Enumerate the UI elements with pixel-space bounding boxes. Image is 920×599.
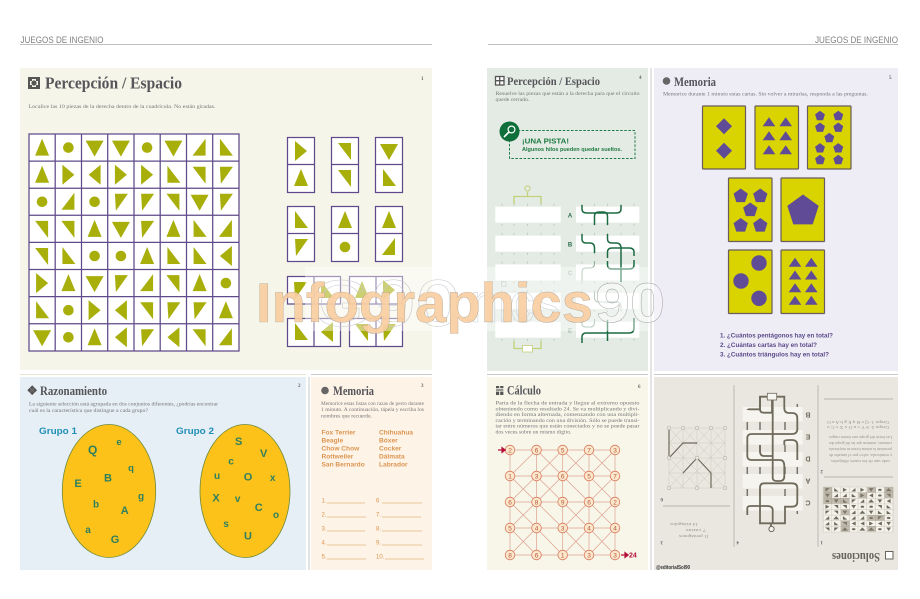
watermark bbox=[256, 266, 665, 340]
group 1 oval: b bbox=[93, 500, 99, 510]
number maze: 3 bbox=[587, 552, 591, 559]
answer lines: 10. bbox=[376, 554, 385, 560]
group 1 oval: A bbox=[121, 505, 129, 517]
instruction text: Parta de la flecha de entrada y llegue al extremo opuesto bbox=[496, 400, 640, 406]
group 2 oval: u bbox=[214, 471, 220, 482]
circuit: piece letters: A bbox=[568, 214, 573, 220]
group 2 oval: S bbox=[235, 436, 242, 448]
group 2 oval: X bbox=[212, 492, 220, 504]
header right: JUEGOS DE INGENIO bbox=[815, 35, 898, 45]
answer lines: 3. bbox=[322, 526, 327, 532]
heading upside-down bbox=[832, 550, 893, 564]
icon: dice bbox=[28, 77, 40, 89]
panel: memoria cartas bbox=[654, 68, 898, 371]
number maze: 7 bbox=[587, 447, 591, 454]
answer lines: 6 bbox=[376, 498, 380, 504]
number maze: 6 bbox=[508, 499, 512, 506]
solution 2: text: y minúscula, salvo por el tamaño de bbox=[829, 452, 892, 458]
group 2 oval: c bbox=[228, 456, 234, 468]
solution 2: text: cada uno de los trazos dibujados. bbox=[830, 459, 890, 464]
group 2 oval: V bbox=[260, 448, 268, 460]
group 2 oval: C bbox=[255, 502, 263, 514]
panel: percepción / espacio bbox=[20, 68, 432, 370]
number maze: 3 bbox=[613, 552, 617, 559]
number maze: 6 bbox=[535, 552, 539, 559]
solution numbers: 3 bbox=[660, 539, 663, 544]
group 1 oval: E bbox=[74, 478, 82, 490]
number maze: 1 bbox=[561, 552, 565, 559]
solution 1: mini grid bbox=[823, 487, 893, 532]
group labels bbox=[39, 426, 214, 437]
page number: 2 bbox=[298, 384, 301, 389]
arrow: entry bbox=[498, 448, 505, 452]
instruction text: La siguiente selección está agrupada en dos conjuntos diferentes, ¿podrías encontrar bbox=[29, 400, 218, 408]
group 1 oval bbox=[62, 424, 156, 558]
heading: Percepción / Espacio bbox=[507, 74, 600, 88]
number maze: 2 bbox=[613, 499, 617, 506]
instruction text: cuál es la característica que distingue a cada grupo? bbox=[29, 408, 149, 414]
answer lines: 8. bbox=[376, 526, 381, 532]
dog list: Labrador bbox=[379, 462, 408, 468]
instruction text: Resuelve las piezas que están a la derecha para que el circuito bbox=[496, 91, 640, 97]
group 1 oval: q bbox=[128, 463, 134, 474]
page number: 6 bbox=[638, 385, 641, 390]
instruction text: cación y terminando con una división. Sólo se puede transi- bbox=[496, 418, 640, 424]
page number: 3 bbox=[421, 384, 424, 389]
watermark: nics bbox=[470, 271, 560, 334]
solution 2: text: presentan la misma forma en mayúscula bbox=[829, 447, 892, 452]
group 2 oval: U bbox=[244, 530, 252, 542]
number maze: 3 bbox=[535, 473, 539, 480]
solution 4: circuit: C bbox=[805, 498, 811, 506]
dog list: Fox Terrier bbox=[322, 430, 356, 436]
watermark: G90 bbox=[310, 266, 460, 340]
number maze: 1 bbox=[508, 473, 512, 480]
number maze: 6 bbox=[587, 499, 591, 506]
heading upside-down: Soluciones bbox=[832, 550, 880, 564]
number maze: 6 bbox=[535, 447, 539, 454]
group 2 oval: O bbox=[244, 472, 253, 484]
circuit: piece letters bbox=[568, 214, 573, 334]
icon: grid square bbox=[496, 76, 504, 85]
group 1 oval: G bbox=[111, 534, 119, 546]
number maze: 7 bbox=[613, 473, 617, 480]
heading: Memoria bbox=[674, 75, 717, 89]
circuit: piece letters: D bbox=[568, 300, 573, 306]
panel: cálculo bbox=[487, 377, 648, 570]
solution 2: text: comunes, mientras que las del grupo dos bbox=[829, 440, 892, 446]
number maze: 3 bbox=[613, 447, 617, 454]
answer lines: 1. bbox=[322, 498, 327, 504]
answer lines: 9. bbox=[376, 540, 381, 546]
dog list: Chihuahua bbox=[379, 430, 413, 436]
dog list: Dálmata bbox=[379, 454, 405, 460]
solution numbers: 1 bbox=[820, 539, 823, 544]
heading: Razonamiento bbox=[40, 384, 107, 398]
group 1 oval: a bbox=[85, 525, 91, 536]
answer lines: 2. bbox=[322, 512, 327, 518]
instruction text: Memorice estas listas con razas de perro durante bbox=[321, 401, 424, 407]
right separators bbox=[487, 68, 898, 570]
instruction text: nombres que recuerde. bbox=[321, 414, 373, 420]
solution numbers: 4 bbox=[736, 539, 739, 544]
instruction text: Memorice durante 1 minuto estas cartas. Sin volver a mirarlas, responda a las preguntas. bbox=[663, 92, 869, 98]
instruction text: tar entre números que están conectados y no se puede pasar bbox=[496, 424, 640, 430]
solution 3: text: 11 pentágonos bbox=[679, 534, 709, 539]
group 2 oval: x bbox=[270, 473, 276, 484]
solution 3: text: 14 triángulos bbox=[670, 522, 698, 527]
solution 2: text bbox=[826, 420, 892, 464]
instruction text: 1 minuto. A continuación, tápela y escriba los bbox=[321, 407, 424, 413]
instruction text bbox=[496, 400, 640, 436]
page number: 5 bbox=[889, 76, 892, 81]
group labels: Grupo 2 bbox=[176, 426, 214, 437]
callout: hint: Algunos hilos pueden quedar sueltos. bbox=[522, 147, 622, 153]
questions: 1. ¿Cuántos pentágonos hay en total? bbox=[720, 332, 833, 340]
number maze bbox=[505, 445, 620, 560]
solution 2: text: Grupo 2: S V c u O x X v C o bbox=[826, 425, 889, 430]
arrow: exit with result bbox=[621, 552, 637, 560]
number maze: 9 bbox=[561, 499, 565, 506]
questions: 3. ¿Cuántos triángulos hay en total? bbox=[720, 352, 829, 358]
solution 3: text bbox=[670, 522, 709, 539]
solution 3: text: 7 cartas bbox=[686, 528, 706, 533]
answer lines: 5. bbox=[322, 554, 327, 560]
circuit: piece letters: C bbox=[568, 271, 573, 277]
heading: Cálculo bbox=[507, 382, 541, 398]
dog list: Beagle bbox=[322, 438, 343, 444]
group 1 oval: e bbox=[116, 437, 122, 448]
solution 2: text: Grupo 1: Q e B q E g b A a G bbox=[826, 420, 889, 425]
circuit: piece letters: E bbox=[568, 328, 572, 334]
number maze: 3 bbox=[561, 525, 565, 532]
solution 4: circuit: B bbox=[805, 410, 811, 418]
callout: hint bbox=[500, 122, 635, 158]
solution 2: text: Las letras del grupo uno tienen rasgos bbox=[829, 435, 892, 440]
group 2 oval: s bbox=[223, 519, 229, 530]
circuit: left board bbox=[495, 186, 561, 352]
instruction text: Localice las 10 piezas de la derecha dentro de la cuadrícula. No están giradas. bbox=[28, 104, 216, 110]
panel: percepción circuito bbox=[487, 68, 648, 371]
solution numbers: 6 bbox=[660, 496, 663, 501]
group 1 oval: g bbox=[138, 492, 144, 502]
number maze: 4 bbox=[587, 525, 591, 532]
answer lines bbox=[322, 498, 424, 560]
icon: magnifier bbox=[500, 122, 520, 142]
number maze: 5 bbox=[587, 473, 591, 480]
icon: abacus bbox=[496, 386, 503, 395]
dog list: Chow Chow bbox=[322, 446, 360, 452]
dog list: Bóxer bbox=[379, 438, 398, 444]
watermark: 90 bbox=[595, 271, 665, 334]
instruction text bbox=[496, 91, 640, 103]
solution numbers: 2 bbox=[820, 468, 823, 473]
solution 4: circuit bbox=[743, 393, 811, 532]
heading: Memoria bbox=[333, 384, 375, 398]
icon: diamonds bbox=[27, 385, 37, 395]
icon: circle bbox=[663, 77, 670, 85]
group 2 oval: v bbox=[235, 494, 241, 505]
instruction text bbox=[321, 401, 424, 420]
panel separators bbox=[20, 374, 306, 376]
group 2 oval bbox=[200, 424, 290, 558]
circuit: piece letters: B bbox=[568, 242, 573, 248]
solution numbers bbox=[660, 468, 823, 544]
group 2 oval: o bbox=[273, 510, 279, 521]
header left: JUEGOS DE INGENIO bbox=[20, 35, 104, 45]
solution 4: circuit: A bbox=[805, 476, 811, 484]
number maze: 8 bbox=[508, 552, 512, 559]
instruction text bbox=[29, 400, 218, 414]
arrow: exit with result: 24 bbox=[629, 552, 637, 560]
number maze: 4 bbox=[613, 525, 617, 532]
solution 4: circuit: D bbox=[805, 454, 811, 462]
group 1 oval: Q bbox=[88, 443, 97, 457]
loose puzzle pieces bbox=[288, 138, 402, 346]
dog list: Rottweiler bbox=[322, 454, 354, 460]
icon: circle bbox=[321, 387, 329, 394]
circuit: right pieces bbox=[576, 204, 639, 343]
answer lines: 4. bbox=[322, 540, 327, 546]
dog list bbox=[322, 430, 413, 468]
number maze: 5 bbox=[508, 525, 512, 532]
instruction text: obteniendo como resultado 24. Se va multiplicando y divi- bbox=[496, 406, 640, 412]
puzzle grid bbox=[29, 134, 239, 351]
dog list: San Bernardo bbox=[322, 462, 365, 468]
solution 4: circuit: E bbox=[805, 432, 810, 440]
heading: Percepción / Espacio bbox=[45, 74, 182, 92]
number maze: 6 bbox=[561, 473, 565, 480]
group labels: Grupo 1 bbox=[39, 426, 78, 437]
dog list: Cocker bbox=[379, 446, 402, 452]
instruction text: diendo en forma alternada, comenzando con una multipli- bbox=[496, 411, 640, 418]
callout: hint: ¡UNA PISTA! bbox=[522, 136, 569, 146]
panel: memoria razas bbox=[311, 377, 432, 570]
panel: soluciones bbox=[654, 377, 898, 571]
instruction text: quede cerrado. bbox=[496, 97, 530, 103]
group 1 oval: B bbox=[104, 472, 112, 484]
page number: 1 bbox=[421, 77, 424, 82]
page number: 4 bbox=[639, 76, 642, 81]
panel: razonamiento bbox=[20, 377, 306, 570]
questions bbox=[720, 332, 833, 358]
cards bbox=[702, 106, 851, 314]
answer lines: 7. bbox=[376, 512, 381, 518]
number maze: 8 bbox=[535, 499, 539, 506]
credit: @editorialSol90 bbox=[656, 565, 690, 571]
questions: 2. ¿Cuántas cartas hay en total? bbox=[720, 342, 817, 349]
number maze: 4 bbox=[535, 525, 539, 532]
number maze: 5 bbox=[561, 447, 565, 454]
watermark: Infographics bbox=[256, 271, 593, 334]
instruction text: dos veces sobre un mismo dígito. bbox=[496, 430, 572, 436]
solution 6: small maze bbox=[667, 426, 727, 490]
number maze: 2 bbox=[508, 447, 512, 454]
card symbols bbox=[716, 111, 843, 306]
